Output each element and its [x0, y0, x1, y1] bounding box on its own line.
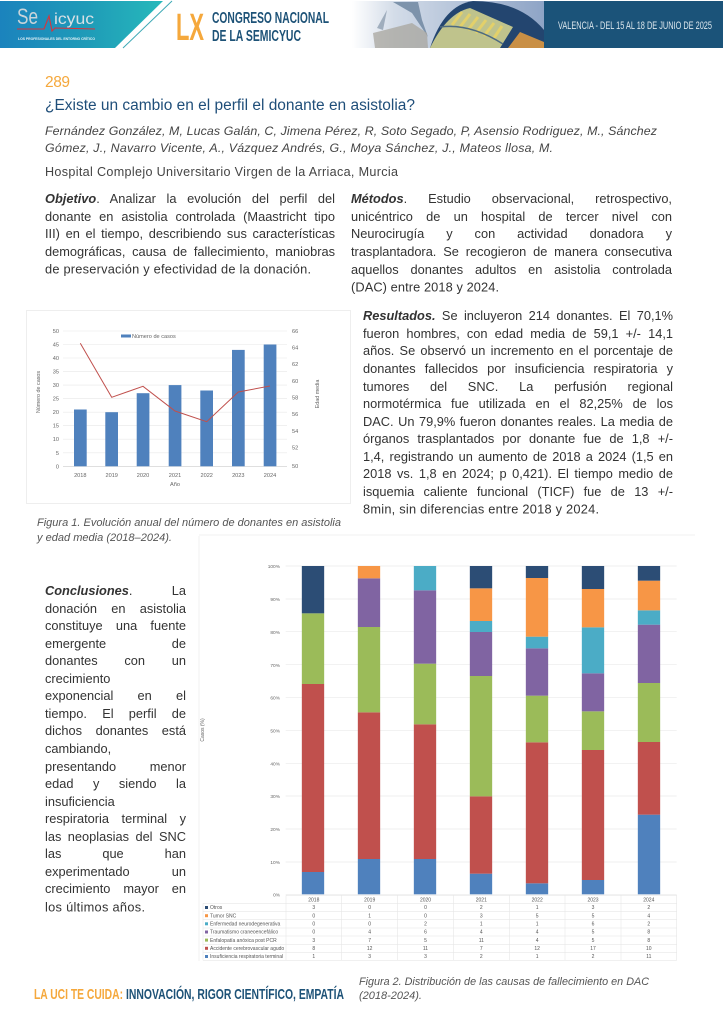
- objetivo text: de preservación y efectividad de la donación.: [45, 262, 311, 276]
- table values: 3: [312, 938, 315, 944]
- table row names: Tumor SNC: [210, 913, 237, 919]
- table values: 6: [592, 922, 595, 928]
- year labels: Año: [170, 482, 180, 488]
- right axis labels: 54: [292, 429, 298, 435]
- logo panel: Se: [17, 4, 38, 29]
- table values: 3: [312, 905, 315, 911]
- conclusiones text: tiempo. El perfil de: [45, 706, 186, 721]
- axis titles: Número de casos: [36, 371, 42, 413]
- left axis labels: [53, 329, 59, 470]
- resultados text: fueron hombres, con edad media de 59,1 +/- 14,1: [363, 326, 673, 340]
- figure 2 caption: (2018-2024).: [359, 990, 422, 1002]
- year labels: 2020: [137, 473, 149, 479]
- congress title: DE LA SEMICYUC: [212, 28, 301, 45]
- table values: 4: [536, 938, 539, 944]
- conclusiones text: donantes con un: [45, 653, 186, 668]
- y axis labels: 50%: [270, 728, 281, 734]
- conclusiones text: constituye una fuente: [45, 618, 186, 633]
- table values: 2022: [532, 897, 543, 903]
- year labels: [74, 473, 276, 488]
- conclusiones text: las que han: [45, 846, 186, 861]
- table values: 2021: [476, 897, 487, 903]
- table values: 10: [646, 946, 652, 952]
- header banner: [0, 0, 723, 49]
- footer slogan: [34, 985, 344, 1003]
- resultados text: Resultados. Se incluyeron 214 donantes. El 70,1%: [363, 308, 673, 323]
- y axis labels: 90%: [270, 597, 281, 603]
- y axis title: Casos (%): [200, 718, 206, 742]
- congress title: CONGRESO NACIONAL: [212, 10, 329, 27]
- bars: número de casos: [74, 344, 276, 466]
- left axis labels: 0: [56, 464, 59, 470]
- figure 1: bar and line chart: [26, 310, 351, 504]
- bar 2021: [470, 566, 492, 894]
- date band: [544, 1, 723, 48]
- table values: 7: [480, 946, 483, 952]
- resultados text: 8min, sin diferencias entre 2018 y 2024.: [363, 502, 599, 516]
- left axis labels: 50: [53, 329, 59, 335]
- conclusiones text: Conclusiones. La: [45, 583, 186, 598]
- table values: 8: [647, 930, 650, 936]
- legend: Número de casos: [132, 334, 176, 340]
- conclusiones text: edad y siendo la: [45, 776, 186, 791]
- table values: 11: [423, 946, 428, 952]
- y axis labels: 20%: [270, 827, 281, 833]
- logo panel: LOS PROFESIONALES DEL ENTORNO CRÍTICO: [18, 36, 95, 41]
- table values: 4: [480, 930, 483, 936]
- table values: 5: [592, 913, 595, 919]
- table values: 1: [536, 954, 539, 960]
- bar 2023: [582, 566, 604, 894]
- resultados text: isquemia caliente funcional (TICF) fue de 13 +/-: [363, 484, 673, 498]
- table values: 4: [647, 913, 650, 919]
- resultados text: años. Se observó un incremento en el porcentaje de: [363, 343, 673, 358]
- abstract heading block: [45, 74, 658, 179]
- conclusiones text: exponencial en el: [45, 688, 186, 703]
- table values: 5: [536, 913, 539, 919]
- authors: Gómez, J., Navarro Vicente, A., Vázquez Andrés, G., Moya Sánchez, J., Mateos llosa, M.: [45, 141, 553, 155]
- year labels: 2023: [232, 473, 245, 479]
- resultados text: donantes fallecidos por insuficiencia respiratoria y: [363, 361, 673, 376]
- abstract number: 289: [45, 74, 70, 91]
- left axis labels: 15: [53, 424, 59, 430]
- table values: 11: [479, 938, 484, 944]
- y axis labels: 30%: [270, 794, 281, 800]
- figure 2: stacked bar chart with data table: [198, 534, 695, 961]
- right axis labels: 66: [292, 329, 298, 335]
- axis titles: [36, 371, 321, 413]
- table values: 0: [368, 905, 371, 911]
- metodos text: [351, 191, 672, 294]
- table values: 17: [590, 946, 596, 952]
- year labels: 2019: [105, 473, 118, 479]
- bar 2018: [302, 566, 324, 894]
- left axis labels: 40: [53, 356, 59, 362]
- conclusiones text: crecimiento: [45, 671, 110, 686]
- bar 2020: [414, 566, 436, 894]
- objetivo text: III) en el tiempo, describiendo sus características: [45, 226, 335, 241]
- bar 2024: [638, 566, 660, 894]
- table values: 0: [312, 913, 315, 919]
- table values: 2: [647, 905, 650, 911]
- table values: 2: [592, 954, 595, 960]
- left axis labels: 10: [53, 437, 59, 443]
- table values: 6: [424, 930, 427, 936]
- footer slogan: INNOVACIÓN, RIGOR CIENTÍFICO, EMPATÍA: [126, 985, 344, 1003]
- metodos text: (DAC) entre 2018 y 2024.: [351, 280, 499, 294]
- table values: 3: [424, 954, 427, 960]
- table values: 2019: [364, 897, 375, 903]
- table values: 2023: [587, 897, 599, 903]
- conclusiones text: insuficiencia: [45, 794, 115, 809]
- metodos text: aquellos donantes adultos en asistolia controlada: [351, 262, 672, 276]
- table values: 1: [536, 922, 539, 928]
- conclusiones text: los últimos años.: [45, 900, 145, 914]
- table values: [308, 897, 655, 960]
- table values: 12: [534, 946, 540, 952]
- y axis labels: 10%: [270, 860, 281, 866]
- y axis labels: 40%: [270, 762, 281, 768]
- conclusiones text: dichos donantes está: [45, 723, 186, 738]
- table values: 5: [424, 938, 427, 944]
- objetivo text: [45, 191, 335, 276]
- resultados text: DAC. Un 79,9% fueron donantes reales. La media de: [363, 414, 673, 428]
- table values: 8: [312, 946, 315, 952]
- table values: 1: [312, 954, 315, 960]
- table values: 0: [312, 922, 315, 928]
- footer slogan: LA UCI TE CUIDA:: [34, 986, 123, 1003]
- table row names: Otros: [210, 905, 223, 911]
- right axis labels: 62: [292, 362, 298, 368]
- table values: 2020: [420, 897, 431, 903]
- table row names: Enfermedad neurodegenerativa: [210, 922, 281, 928]
- metodos text: Neurocirugía y con actividad donadora y: [351, 226, 672, 241]
- conclusiones text: experimentado un: [45, 864, 186, 879]
- table values: 4: [536, 930, 539, 936]
- table values: 5: [592, 938, 595, 944]
- conclusiones text: presentando menor: [45, 758, 186, 774]
- congress title: LX: [176, 7, 204, 49]
- table values: 5: [592, 930, 595, 936]
- left axis labels: 5: [56, 451, 59, 457]
- data table: [203, 895, 677, 960]
- left axis labels: 20: [53, 410, 59, 416]
- table values: 2: [480, 905, 483, 911]
- conclusiones text: cambiando,: [45, 741, 111, 756]
- conclusiones text: crecimiento mayor en: [45, 881, 186, 896]
- conclusiones text: respiratoria terminal y: [45, 811, 186, 826]
- resultados text: tumores del SNC. La perfusión regional: [363, 378, 673, 394]
- resultados text: órganos trasplantados por donante fue de 1,8 +/-: [363, 431, 673, 446]
- resultados text: normotérmica fue utilizada en el 82,25% de los: [363, 396, 673, 411]
- axis titles: Edad media: [315, 380, 321, 408]
- year labels: 2022: [200, 473, 213, 479]
- table values: 8: [647, 938, 650, 944]
- conclusiones text: donación en asistolia: [45, 600, 186, 616]
- table values: 1: [480, 922, 483, 928]
- table values: 2: [647, 922, 650, 928]
- table values: 0: [424, 905, 427, 911]
- title: ¿Existe un cambio en el perfil el donante en asistolia?: [45, 97, 415, 114]
- hospital: Hospital Complejo Universitario Virgen de la Arriaca, Murcia: [45, 165, 398, 179]
- table row names: Traumatismo craneoencefálico: [210, 930, 278, 936]
- year labels: 2024: [264, 473, 276, 479]
- figure 1 caption: [36, 517, 341, 544]
- y axis labels: 0%: [273, 892, 281, 898]
- metodos text: unicéntrico de un hospital de tercer nivel con: [351, 208, 672, 224]
- table values: 3: [592, 905, 595, 911]
- right axis labels: 64: [292, 346, 298, 352]
- right axis labels: 58: [292, 396, 298, 402]
- table row names: Enfalopatía anóxica post PCR: [210, 938, 277, 944]
- table values: 2: [480, 954, 483, 960]
- conclusiones text: [45, 583, 186, 914]
- table values: 12: [367, 946, 373, 952]
- congress title: [176, 7, 329, 49]
- resultados text: 2018 vs. 1,8 en 2024; p 0,421). El tiempo medio de: [363, 466, 673, 481]
- y axis labels: [268, 564, 281, 898]
- bar 2019: [358, 566, 380, 894]
- resultados text: [363, 308, 673, 516]
- left axis labels: 45: [53, 342, 59, 348]
- logo panel: icyuc: [54, 11, 94, 28]
- figure 2 caption: Figura 2. Distribución de las causas de fallecimiento en DAC: [359, 976, 649, 988]
- left axis labels: 35: [53, 370, 59, 376]
- photo: Valencia architecture: [352, 1, 544, 48]
- table values: 3: [480, 913, 483, 919]
- table values: 3: [368, 954, 371, 960]
- year labels: 2021: [169, 473, 181, 479]
- right axis labels: 56: [292, 412, 298, 418]
- figure 1 caption: Figura 1. Evolución anual del número de donantes en asistolia: [37, 517, 341, 529]
- table swatches: [205, 906, 208, 958]
- left axis labels: 30: [53, 383, 59, 389]
- y axis labels: 60%: [270, 696, 281, 702]
- metodos text: trasplantadora. Se recogieron de manera consecutiva: [351, 244, 672, 259]
- logo panel: [0, 1, 172, 48]
- table values: 2024: [643, 897, 655, 903]
- left axis labels: 25: [53, 397, 59, 403]
- conclusiones text: emergente de: [45, 636, 186, 651]
- table values: 11: [646, 954, 652, 960]
- conclusiones text: las neoplasias del SNC: [45, 829, 186, 844]
- table values: 0: [424, 913, 427, 919]
- table values: 0: [312, 930, 315, 936]
- table values: 2018: [308, 897, 320, 903]
- figure 1 caption: y edad media (2018–2024).: [36, 532, 172, 544]
- right axis labels: [292, 329, 298, 470]
- resultados text: 1,4, registrando un aumento de 2018 a 2024 (1,5 en: [363, 448, 673, 464]
- table values: 2: [424, 922, 427, 928]
- authors: Fernández González, M, Lucas Galán, C, Jimena Pérez, R, Soto Segado, P, Asensio Rodriguez, M., Sánchez: [45, 124, 658, 138]
- y axis labels: 100%: [268, 564, 281, 570]
- y axis labels: 70%: [270, 663, 281, 669]
- right axis labels: 52: [292, 446, 298, 452]
- right axis labels: 50: [292, 464, 298, 470]
- table values: 7: [368, 938, 371, 944]
- table row names: Insuficiencia respiratoria terminal: [210, 954, 283, 960]
- y axis labels: 80%: [270, 630, 281, 636]
- table values: 0: [368, 922, 371, 928]
- figure 2 caption: [359, 976, 649, 1002]
- objetivo text: donante en asistolia controlada (Maastricht tipo: [45, 208, 335, 224]
- objetivo text: demográficas, causa de fallecimiento, maniobras: [45, 244, 335, 258]
- table values: 1: [368, 913, 371, 919]
- bar 2022: [526, 566, 548, 894]
- authors: [45, 124, 658, 155]
- objetivo text: Objetivo. Analizar la evolución del perfil del: [45, 191, 335, 206]
- right axis labels: 60: [292, 379, 298, 385]
- table values: 1: [536, 905, 539, 911]
- line: edad media: [80, 343, 270, 422]
- table row names: [210, 905, 284, 960]
- metodos text: Métodos. Estudio observacional, retrospectivo,: [351, 191, 672, 206]
- table row names: Accidente cerebrovascular agudo: [210, 946, 284, 952]
- table values: 4: [368, 930, 371, 936]
- year labels: 2018: [74, 473, 87, 479]
